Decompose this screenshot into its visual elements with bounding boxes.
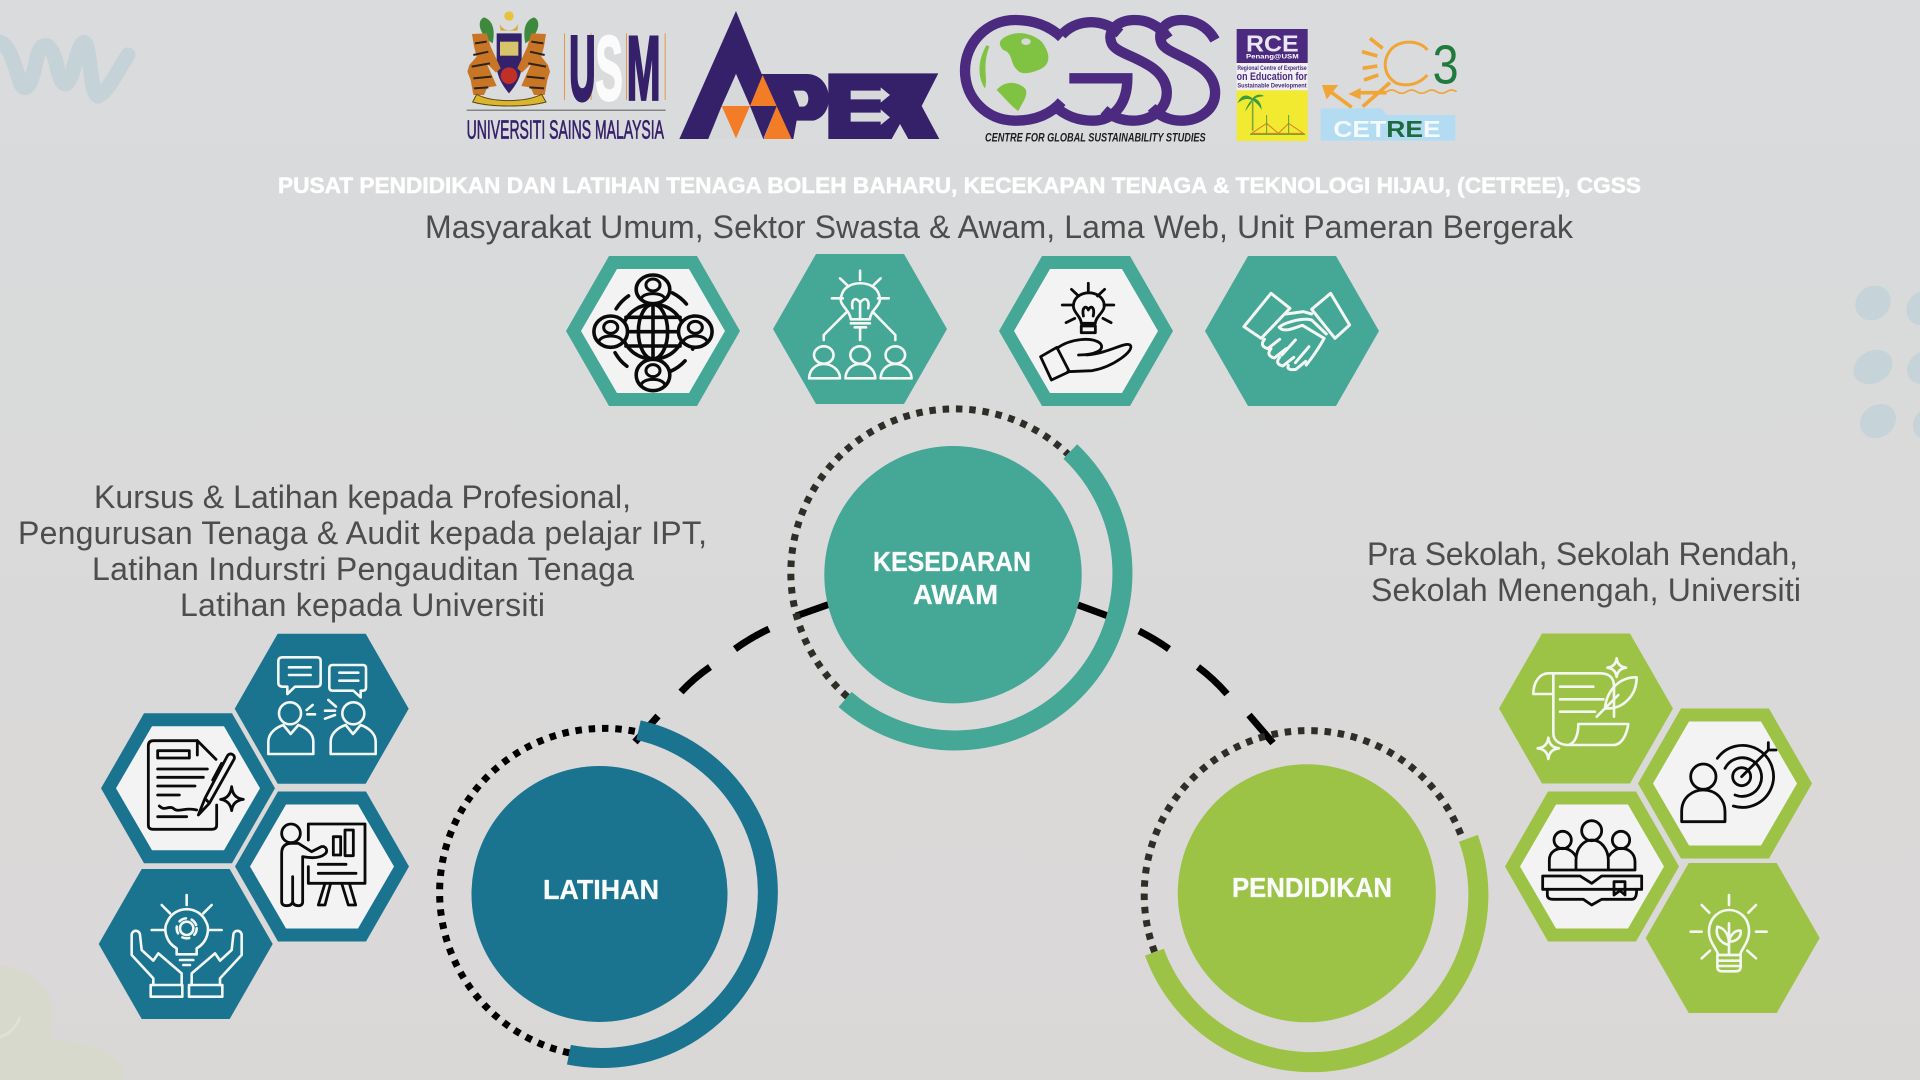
hex: presenter xyxy=(235,792,409,942)
decoration: squiggle xyxy=(0,42,128,96)
hex: global network xyxy=(566,256,740,406)
hex: idea in hand xyxy=(999,256,1173,406)
icon: target person xyxy=(1682,743,1776,822)
node: pendidikan xyxy=(1144,731,1478,1062)
text: latihan audience: Latihan Indurstri Pengauditan Tenaga xyxy=(92,551,634,587)
label: PENDIDIKAN xyxy=(1232,872,1392,903)
title: PUSAT PENDIDIKAN DAN LATIHAN TENAGA BOLEH BAHARU, KECEKAPAN TENAGA & TEKNOLOGI HIJAU, (CETREE), CGSS xyxy=(278,173,1641,198)
text: pendidikan audience: Pra Sekolah, Sekolah Rendah, xyxy=(1367,536,1798,572)
label: LATIHAN xyxy=(543,874,659,905)
university name: UNIVERSITI SAINS MALAYSIA xyxy=(467,115,664,145)
dotted ring xyxy=(1144,731,1463,952)
hex: group reading xyxy=(1505,792,1679,942)
logo: C3 CETREE xyxy=(1321,33,1459,142)
circle xyxy=(1178,764,1436,1022)
circle xyxy=(824,446,1082,703)
arc xyxy=(1154,838,1478,1062)
logo: RCE: Regional Centre of Expertise xyxy=(1237,65,1307,72)
circle xyxy=(472,766,728,1022)
icon: green idea xyxy=(1691,895,1767,971)
crest xyxy=(467,11,550,106)
logo: C3 CETREE: CETREE xyxy=(1333,116,1441,142)
dotted ring xyxy=(440,728,638,1053)
label: AWAM xyxy=(913,579,998,610)
USM letters: S xyxy=(595,18,623,119)
logo: USM xyxy=(467,11,666,145)
text: latihan audience: Kursus & Latihan kepada Profesional, xyxy=(94,479,631,515)
hex: idea to team xyxy=(773,254,947,404)
decoration: dots xyxy=(1847,278,1920,447)
hex: scroll and quill xyxy=(1499,634,1673,784)
arc xyxy=(569,730,768,1058)
hex: document signing xyxy=(101,713,275,863)
text: pendidikan audience xyxy=(1367,536,1801,608)
icon: global network xyxy=(594,275,712,391)
logo: RCE: RCE xyxy=(1246,31,1299,57)
icon: group reading xyxy=(1543,821,1642,905)
logo: C3 CETREE: 3 xyxy=(1433,33,1459,95)
arc xyxy=(845,452,1122,740)
node: latihan xyxy=(440,728,768,1058)
letters xyxy=(965,20,1215,121)
text: pendidikan audience: Sekolah Menengah, Universiti xyxy=(1371,572,1801,608)
dotted ring xyxy=(791,409,1068,697)
logo: CGSS xyxy=(965,20,1215,144)
text: latihan audience: Pengurusan Tenaga & Audit kepada pelajar IPT, xyxy=(18,515,707,551)
logo: RCE xyxy=(1237,29,1308,141)
logo: RCE: on Education for xyxy=(1237,71,1308,83)
icon: idea in hand xyxy=(1041,283,1131,380)
icon: scroll and quill xyxy=(1533,658,1637,759)
label xyxy=(873,546,1031,610)
hex: handshake xyxy=(1205,256,1379,406)
icon: discussion xyxy=(268,657,376,754)
node: kesedaran awam xyxy=(791,409,1122,740)
icon: handshake xyxy=(1244,293,1350,370)
logo: APEX xyxy=(679,11,939,139)
icon: presenter xyxy=(282,824,365,906)
hex: green idea xyxy=(1646,863,1820,1013)
connector: kesedaran to pendidikan xyxy=(1078,605,1273,743)
decoration: blob xyxy=(0,967,124,1080)
logo: RCE: Sustainable Development xyxy=(1237,82,1307,89)
label: KESEDARAN xyxy=(873,546,1031,577)
text: latihan audience xyxy=(18,479,707,623)
USM letters: M xyxy=(627,18,661,119)
USM letters xyxy=(564,18,666,119)
hex: discussion xyxy=(235,634,409,784)
icon: idea to team xyxy=(809,271,912,378)
hex: target person xyxy=(1638,708,1812,858)
divider xyxy=(467,109,666,112)
globe xyxy=(980,33,1048,111)
icon: innovation hands xyxy=(132,895,242,997)
subtitle: kesedaran awam audience: Masyarakat Umum, Sektor Swasta & Awam, Lama Web, Unit Pameran Bergerak xyxy=(425,209,1574,245)
hex: innovation hands xyxy=(99,869,273,1019)
text: latihan audience: Latihan kepada Universiti xyxy=(180,587,545,623)
tagline: CENTRE FOR GLOBAL SUSTAINABILITY STUDIES xyxy=(985,130,1206,144)
connector: kesedaran to latihan xyxy=(635,604,830,742)
icon: document signing xyxy=(148,741,243,829)
USM letters: U xyxy=(569,18,595,119)
logo: RCE: Penang@USM xyxy=(1246,55,1299,61)
